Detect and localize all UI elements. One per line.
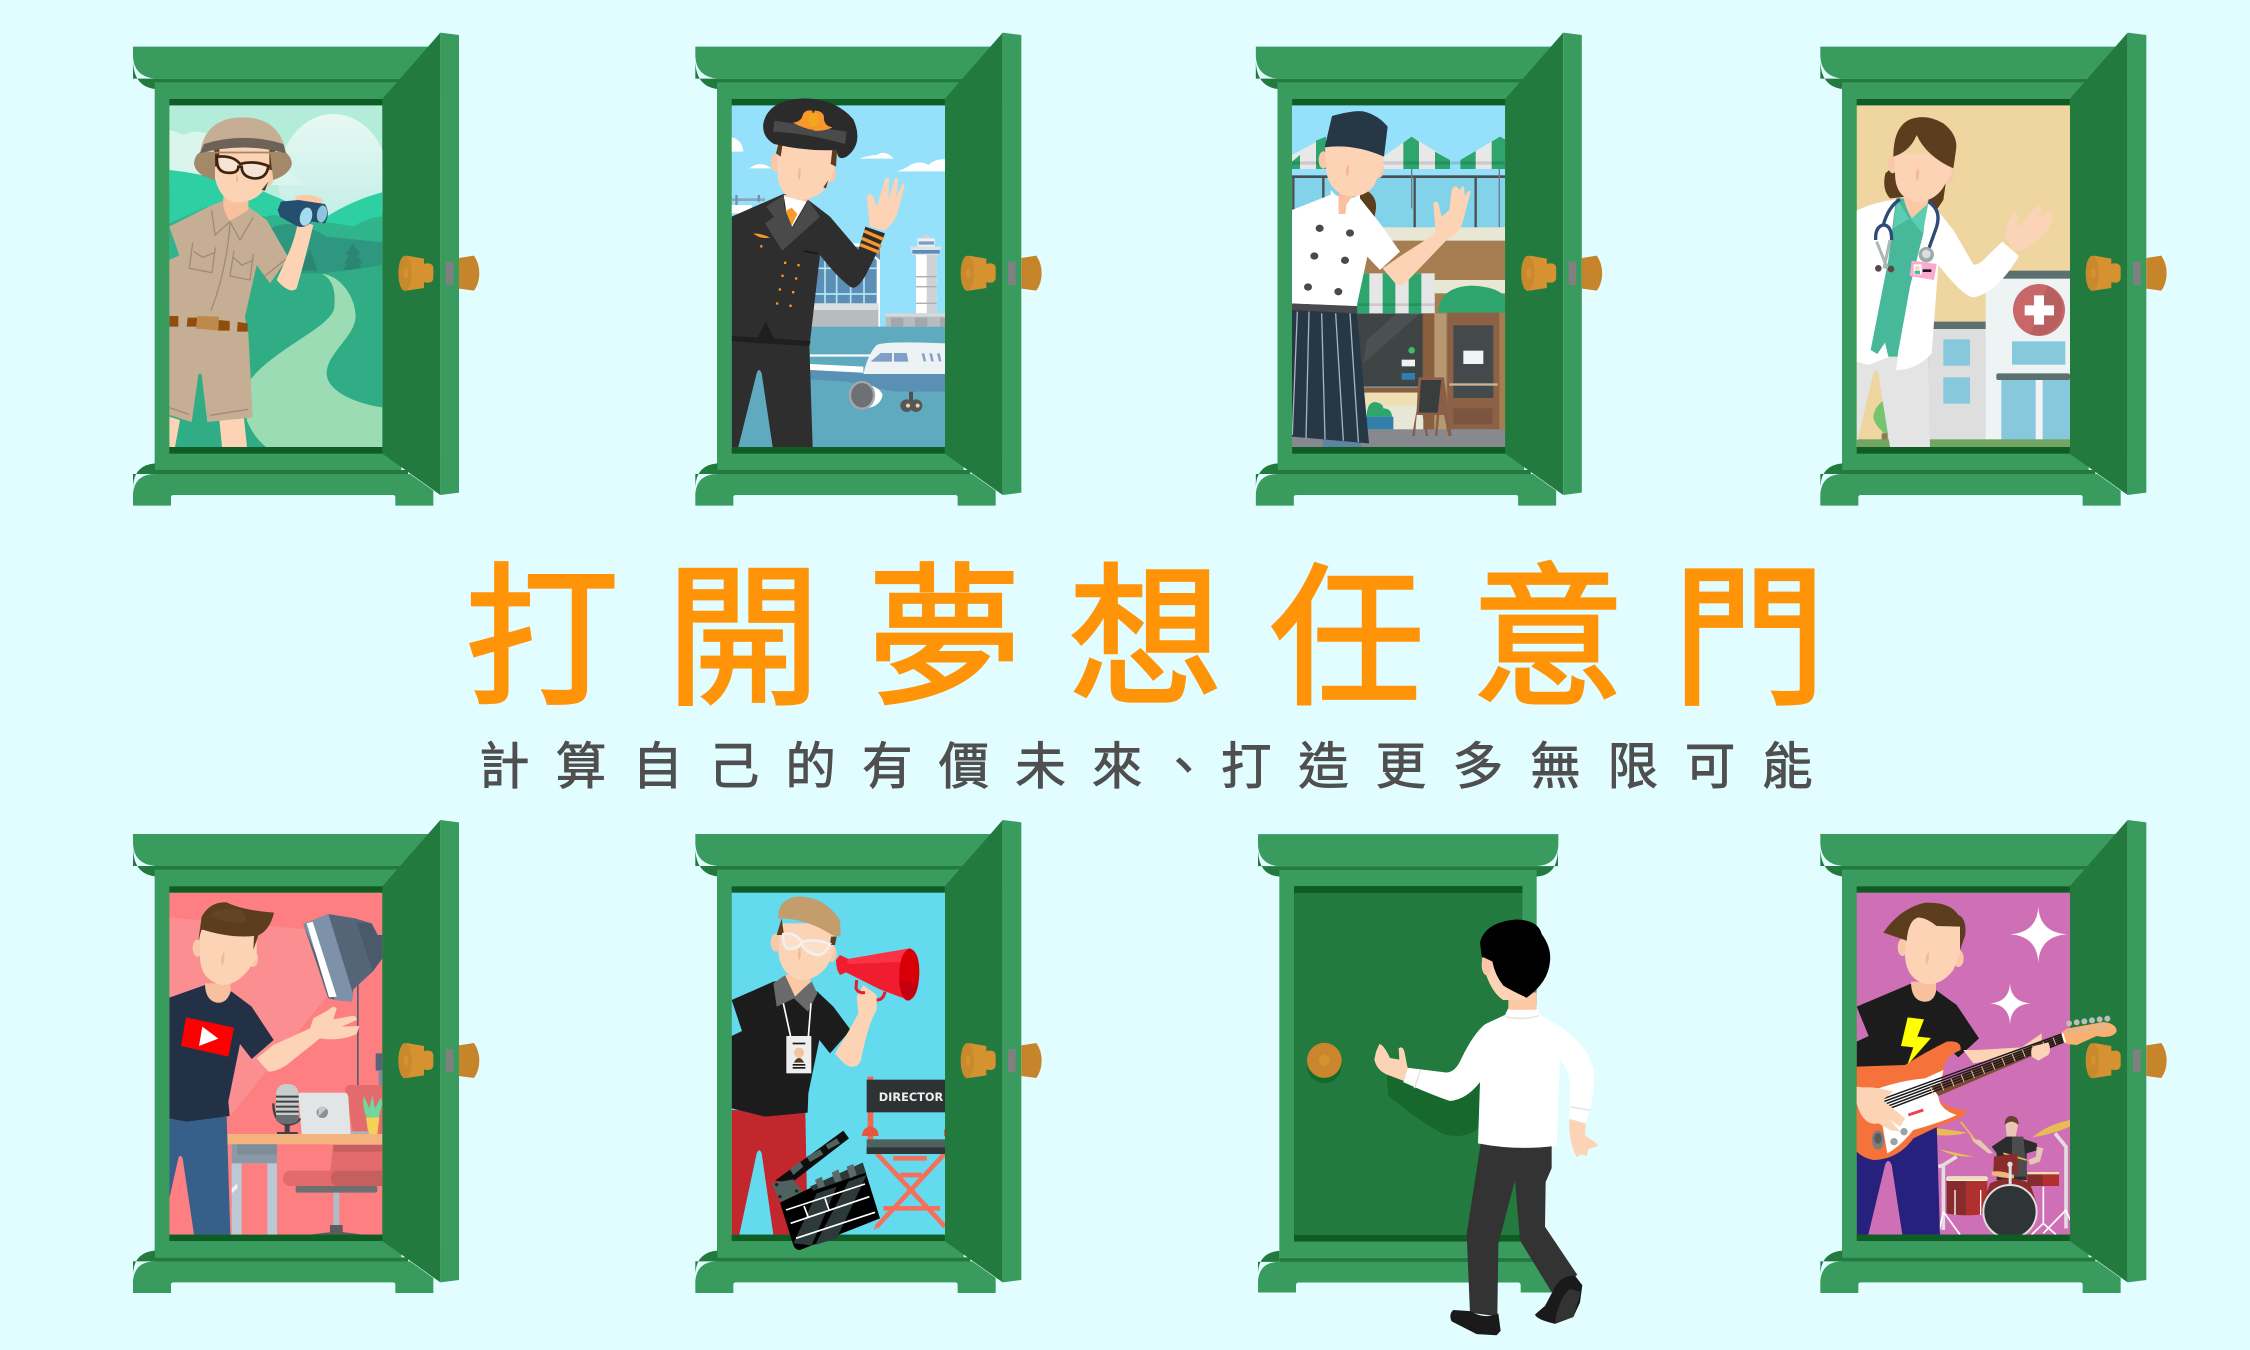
title: 打開夢想任意門 <box>465 553 1873 725</box>
icon: electric guitar <box>1857 1016 2117 1160</box>
scene: doctor at hospital <box>1857 105 2070 447</box>
door: doctor <box>1820 33 2167 506</box>
door: guitarist <box>1820 820 2167 1293</box>
door: explorer <box>133 33 479 506</box>
door frame <box>133 33 479 506</box>
door frame <box>1256 33 1602 506</box>
scene: pilot at airport <box>732 105 945 447</box>
door frame <box>133 820 479 1293</box>
door frame <box>1820 820 2167 1293</box>
door frame <box>695 820 1042 1293</box>
door frame <box>695 33 1042 506</box>
icon: clapperboard <box>772 1131 880 1250</box>
label: director chair: DIRECTOR <box>879 1090 944 1104</box>
scene: guitarist with drummer <box>1857 893 2070 1238</box>
scene: YouTuber in studio <box>169 893 383 1235</box>
icon: megaphone <box>836 948 919 1001</box>
man reaching for door <box>1374 920 1598 1335</box>
door frame <box>1820 33 2167 506</box>
door: closed door with man <box>1258 834 1598 1335</box>
door: pilot <box>695 33 1042 506</box>
door: film director <box>695 820 1042 1293</box>
scene: explorer in green hills <box>169 105 388 447</box>
door: chef <box>1256 33 1602 506</box>
closed door frame <box>1258 834 1558 1292</box>
scene: chef at restaurant <box>1292 105 1505 447</box>
pilot cap <box>763 98 857 158</box>
subtitle: 計算自己的有價未來、打造更多無限可能 <box>479 738 1812 795</box>
scene: director with megaphone <box>732 893 945 1235</box>
door: YouTuber <box>133 820 479 1293</box>
